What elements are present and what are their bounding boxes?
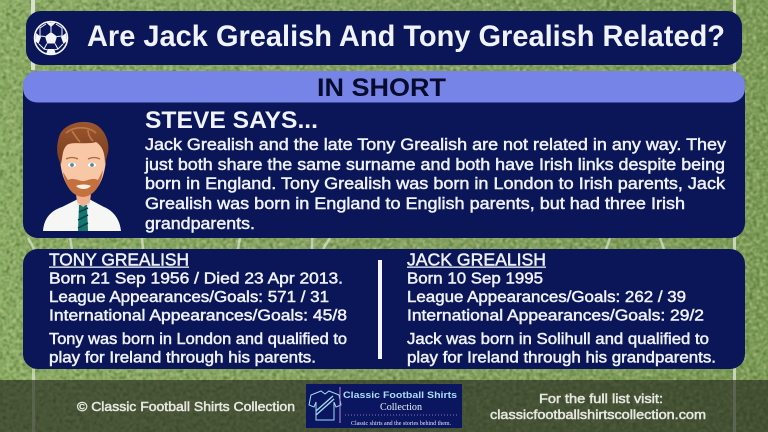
call to action text: classicfootballshirtscollection.com xyxy=(490,407,706,422)
column: Tony Grealish: League Appearances/Goals: 571 / 31 xyxy=(49,289,329,306)
column: Tony Grealish: play for Ireland through his parents. xyxy=(49,350,316,366)
column: Jack Grealish xyxy=(407,250,716,366)
icon: Steve avatar xyxy=(43,122,121,231)
text block: Steve says body: just both share the same surname and both have Irish links despite being xyxy=(144,155,725,174)
heading: in short: IN SHORT xyxy=(317,74,446,102)
text block: Steve says body: born in England. Tony Grealish was born in London to Irish parents, Jack xyxy=(145,174,726,193)
text block: Steve says body xyxy=(144,135,727,233)
in short header bar xyxy=(23,71,745,102)
call to action text xyxy=(490,391,706,422)
copyright text: © Classic Football Shirts Collection xyxy=(77,399,295,414)
logo wordmark: Classic Football Shirts xyxy=(343,390,457,401)
column: Jack Grealish: Jack was born in Solihull and qualified to xyxy=(407,331,709,348)
text block: Steve says body: Grealish was born in England to English parents, but had three Irish xyxy=(145,194,685,213)
icon: shirt xyxy=(309,391,341,420)
title banner xyxy=(26,11,742,65)
panel: player comparison xyxy=(23,249,745,369)
call to action text: For the full list visit: xyxy=(539,391,663,406)
text block: Steve says body: grandparents. xyxy=(145,214,255,233)
column: Tony Grealish: International Appearances/Goals: 45/8 xyxy=(49,308,347,324)
title text: Are Jack Grealish And Tony Grealish Related? xyxy=(87,20,725,53)
column: Jack Grealish: International Appearances/Goals: 29/2 xyxy=(407,308,704,324)
logo: Classic Football Shirts Collection: Classic shirts and the stories behind them. xyxy=(351,421,451,427)
panel: in short xyxy=(23,71,745,238)
column: Jack Grealish: Born 10 Sep 1995 xyxy=(407,270,543,288)
heading: Steve says: STEVE SAYS... xyxy=(145,107,318,134)
footer band xyxy=(0,380,768,432)
column: Tony Grealish: Tony was born in London and qualified to xyxy=(49,331,347,348)
column: Jack Grealish: play for Ireland through his grandparents. xyxy=(407,350,716,366)
logo: Classic Football Shirts Collection xyxy=(306,384,462,428)
logo: Classic Football Shirts Collection: Collection xyxy=(380,402,422,413)
column: Jack Grealish: JACK GREALISH xyxy=(407,250,546,270)
column: Tony Grealish xyxy=(49,250,347,366)
text block: Steve says body: Jack Grealish and the late Tony Grealish are not related in any way. They xyxy=(145,135,727,154)
column: Tony Grealish: TONY GREALISH xyxy=(49,250,189,270)
icon: football xyxy=(34,22,68,55)
column: Jack Grealish: League Appearances/Goals: 262 / 39 xyxy=(407,289,686,306)
column: Tony Grealish: Born 21 Sep 1956 / Died 23 Apr 2013. xyxy=(49,270,343,288)
